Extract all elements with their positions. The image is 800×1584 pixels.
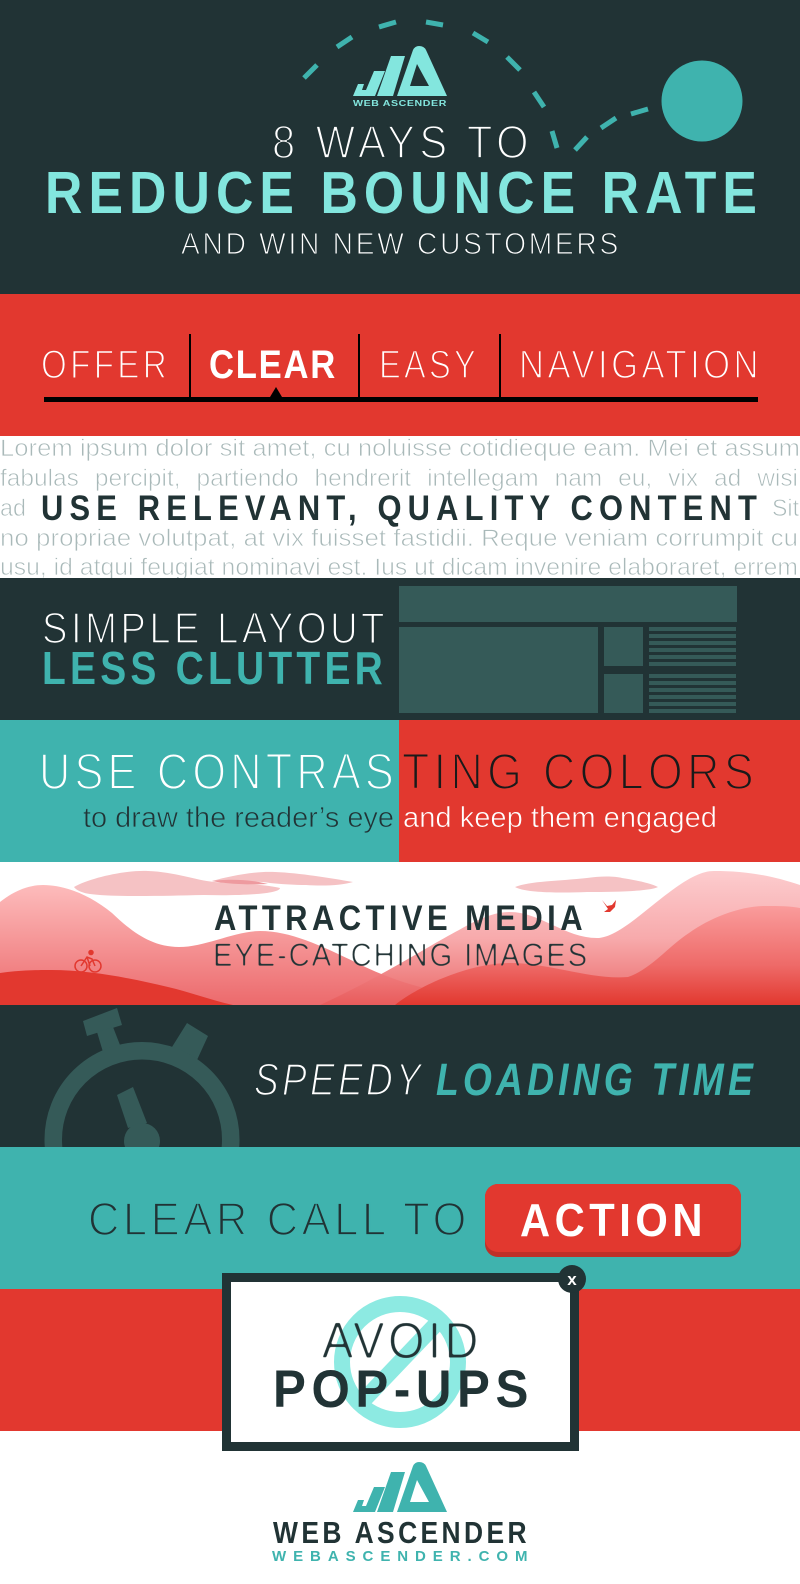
panel: contrasting colors: [0, 720, 800, 862]
panel: clear navigation: [0, 294, 800, 436]
icon: prohibition sign: [342, 1304, 458, 1420]
lorem filler text: Lorem ipsum dolor sit amet, cu noluisse cotidieque eam. Mei et assum: [0, 435, 800, 462]
button: action: ACTION: [520, 1194, 707, 1246]
clouds: [74, 871, 658, 896]
title line 1: 8 WAYS TO: [272, 116, 533, 168]
subtext left: to draw the reader’s eye: [83, 802, 394, 834]
panel: relevant content: [0, 435, 800, 581]
panel: header: [0, 0, 800, 294]
heading: attractive media: ATTRACTIVE MEDIA: [214, 899, 587, 938]
lorem filler text: no propriae volutpat, at vix fuisset fastidii. Reque veniam corrumpit cu: [0, 525, 798, 552]
logo: Web Ascender mark: [353, 1462, 447, 1512]
icon: bird: [602, 900, 616, 912]
heading: avoid: AVOID: [322, 1312, 482, 1369]
nav bar with dividers and pointer: [44, 334, 758, 402]
hills: [0, 871, 800, 1005]
panel: attractive media: [0, 862, 800, 1005]
nav word: easy: EASY: [379, 343, 479, 387]
subheading: eye-catching images: EYE-CATCHING IMAGES: [213, 937, 589, 973]
close button: x: [567, 1270, 577, 1289]
brand name: WEB ASCENDER: [273, 1515, 530, 1550]
popup window: [226, 1265, 586, 1446]
heading: pop-ups: POP-UPS: [273, 1360, 534, 1419]
panel: simple layout: [0, 578, 800, 720]
heading: speedy: SPEEDY: [254, 1054, 424, 1105]
website url: WEBASCENDER.COM: [272, 1548, 535, 1565]
wireframe layout graphic: [399, 586, 737, 713]
lorem filler text: fabulas percipit, partiendo hendrerit intellegam nam eu, vix ad wisi: [0, 465, 798, 492]
logo: Web Ascender top: [353, 46, 447, 108]
heading right half: TING COLORS: [402, 743, 758, 800]
subtext right: and keep them engaged: [403, 802, 717, 834]
heading: less clutter: LESS CLUTTER: [42, 642, 387, 694]
panel: footer: [272, 1462, 535, 1565]
panel: speedy loading time: [0, 1005, 800, 1147]
heading: clear call to: CLEAR CALL TO: [88, 1193, 470, 1245]
close button: [558, 1265, 586, 1293]
bouncing ball: [662, 60, 742, 142]
panel: avoid pop-ups: [0, 1265, 800, 1446]
lorem filler text: usu, id atqui feugiat nominavi est. Ius ut dicam invenire elaboraret, errem: [0, 554, 798, 581]
lorem filler text: [0, 435, 800, 581]
button: action: [485, 1184, 741, 1257]
nav word: clear: CLEAR: [209, 343, 337, 387]
panel: call to action: [0, 1147, 800, 1289]
lorem filler text: Sit: [772, 495, 799, 522]
heading left half: USE CONTRAS: [39, 743, 398, 800]
title line 3: AND WIN NEW CUSTOMERS: [181, 226, 621, 261]
logo: Web Ascender top: WEB ASCENDER: [353, 98, 447, 108]
icon: cyclist: [75, 950, 101, 972]
nav word: navigation: NAVIGATION: [519, 343, 762, 387]
heading: simple layout: SIMPLE LAYOUT: [42, 605, 388, 653]
nav word: offer: OFFER: [41, 343, 170, 387]
bounce path dashes: [304, 22, 648, 150]
icon: stopwatch: [44, 1008, 240, 1147]
lorem filler text: ad: [0, 495, 26, 522]
